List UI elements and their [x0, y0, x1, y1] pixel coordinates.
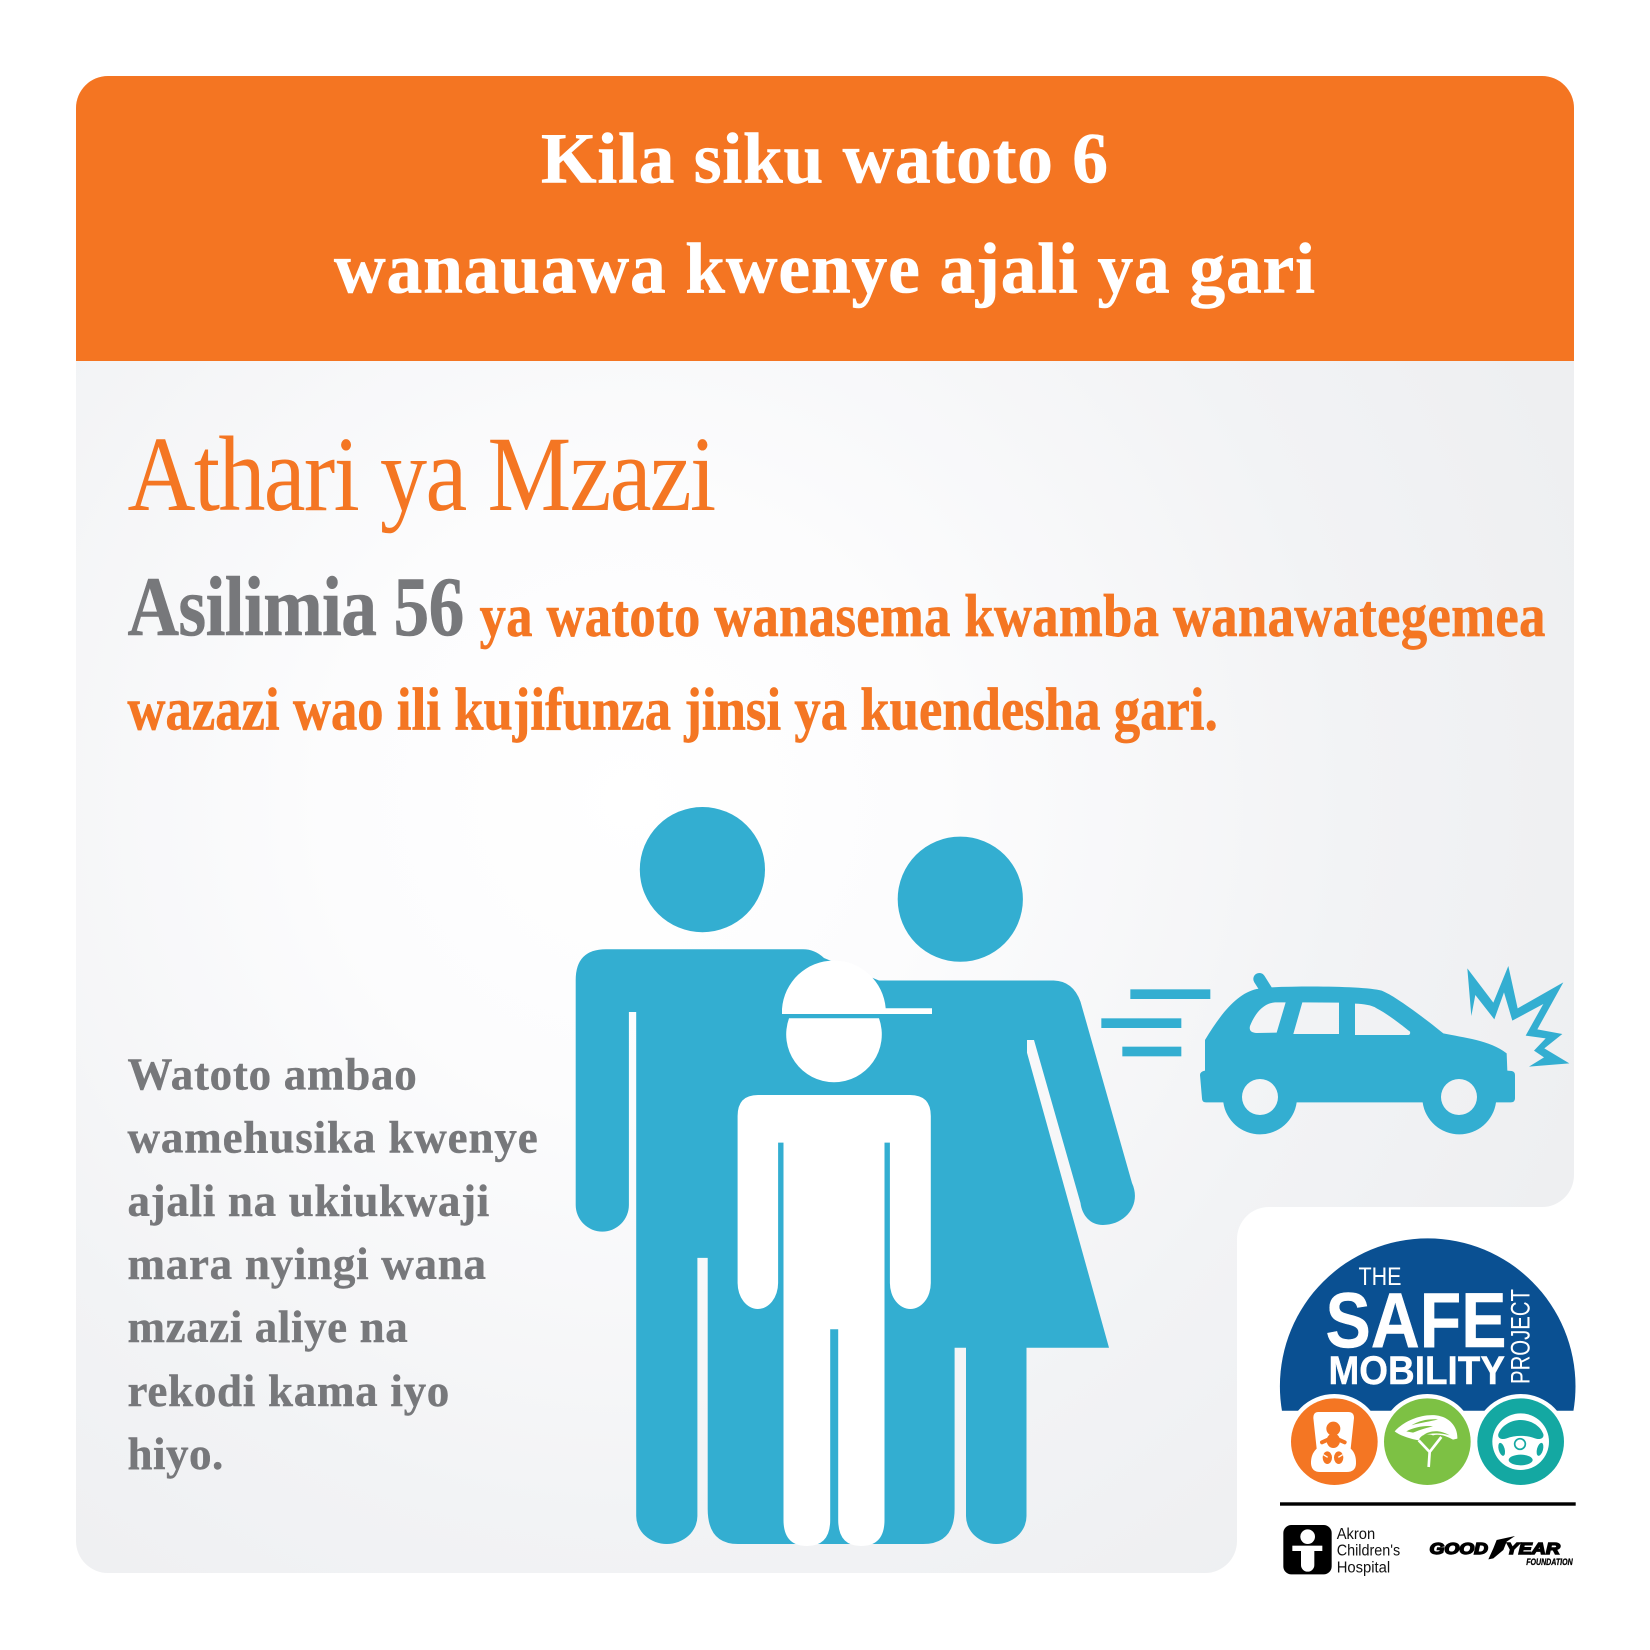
text block: left paragraph: Watoto ambao	[128, 1049, 417, 1099]
goodyear wordmark end: YEAR	[1506, 1541, 1561, 1558]
statistic sentence: ya watoto wanasema kwamba wanawategemea	[480, 584, 1545, 650]
text block: left paragraph: hiyo.	[128, 1429, 223, 1479]
logo wordmark: THE	[1358, 1264, 1402, 1291]
hospital name: Hospital	[1337, 1559, 1390, 1576]
logo wordmark: PROJECT	[1505, 1289, 1535, 1384]
parents bodies	[576, 949, 1135, 1544]
child cap	[782, 961, 932, 1014]
text block: left paragraph: ajali na ukiukwaji	[128, 1176, 489, 1226]
heading: Athari ya Mzazi	[128, 414, 716, 533]
statistic figure: Asilimia 56	[128, 559, 464, 653]
child body	[738, 1095, 931, 1546]
icon: wingfoot	[1488, 1536, 1515, 1559]
statistic sentence	[128, 584, 1545, 743]
icon: helmet	[1384, 1398, 1471, 1485]
antenna	[1259, 979, 1267, 992]
logo dome	[1280, 1238, 1576, 1411]
text block: left paragraph	[128, 1049, 538, 1479]
statistic text	[128, 559, 1545, 743]
panel: grey content background	[76, 361, 1574, 1573]
impact burst	[1467, 966, 1569, 1067]
goodyear wordmark: GOOD	[1430, 1541, 1488, 1558]
statistic sentence: wazazi wao ili kujifunza jinsi ya kuendesha gari.	[128, 677, 1218, 743]
speed lines	[1101, 989, 1210, 1056]
car body	[1200, 987, 1515, 1134]
banner title: wanauawa kwenye ajali ya gari	[334, 230, 1315, 309]
hospital name	[1337, 1526, 1400, 1576]
text block: left paragraph: mzazi aliye na	[128, 1302, 408, 1352]
child figure	[738, 961, 932, 1546]
hospital mark	[1283, 1525, 1332, 1574]
text block: left paragraph: mara nyingi wana	[128, 1239, 486, 1289]
text block: left paragraph: wamehusika kwenye	[128, 1113, 538, 1163]
divider rule	[1280, 1502, 1576, 1506]
icon: crashing car	[1101, 966, 1569, 1134]
child head	[786, 1018, 882, 1082]
logo: Akron Children's Hospital	[1283, 1525, 1400, 1576]
logo wordmark: MOBILITY	[1328, 1349, 1505, 1393]
icon: steering wheel	[1477, 1398, 1564, 1485]
text block: left paragraph: rekodi kama iyo	[128, 1366, 449, 1416]
logo wordmark	[1326, 1264, 1535, 1393]
parent heads	[640, 807, 1023, 962]
foundation label: FOUNDATION	[1526, 1557, 1574, 1568]
logo: Goodyear Foundation	[1430, 1536, 1574, 1568]
banner background	[76, 76, 1574, 361]
logo: The Safe Mobility Project	[1280, 1238, 1576, 1534]
hospital name: Children's	[1337, 1543, 1400, 1560]
banner title	[334, 120, 1315, 309]
banner title: Kila siku watoto 6	[541, 120, 1108, 199]
icon: car seat	[1291, 1398, 1378, 1485]
hospital name: Akron	[1337, 1526, 1375, 1543]
icon rings	[1287, 1394, 1568, 1489]
icon: family figures	[576, 807, 1135, 1546]
logo wordmark: SAFE	[1326, 1276, 1506, 1364]
header banner	[76, 76, 1574, 361]
